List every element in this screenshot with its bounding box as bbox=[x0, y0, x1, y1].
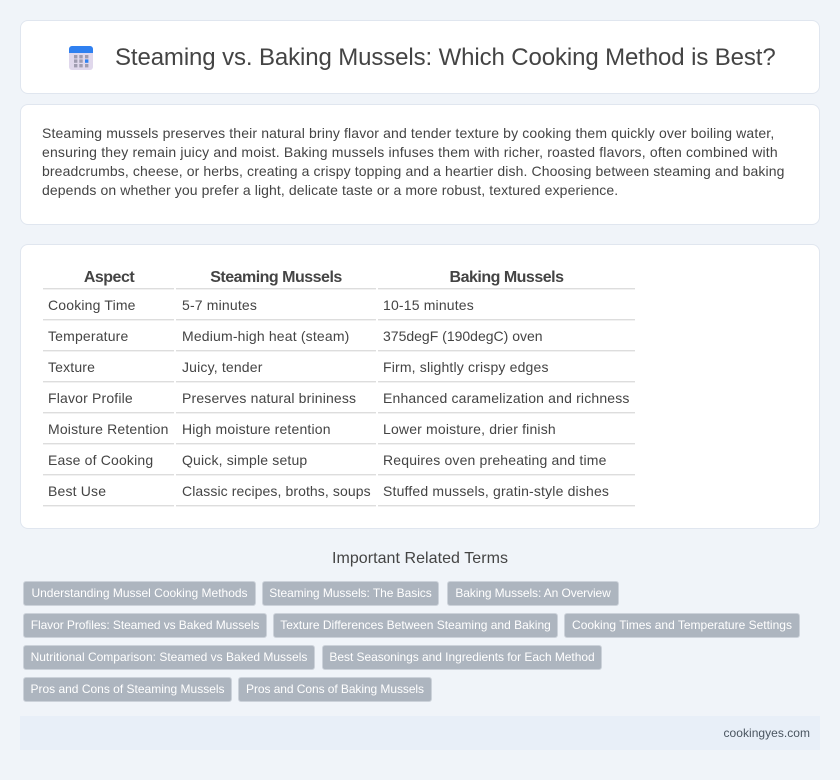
row: texture: Texture bbox=[48, 359, 95, 375]
intro text: Steaming mussels preserves their natural briny flavor and tender texture by cooking them quickly over boiling water, bbox=[42, 125, 774, 141]
row: moisture retention: Lower moisture, drier finish bbox=[383, 421, 556, 437]
row: moisture retention: High moisture retention bbox=[182, 421, 331, 437]
row: ease of cooking: Quick, simple setup bbox=[182, 452, 307, 468]
row: moisture retention bbox=[48, 421, 556, 437]
row: temperature: Temperature bbox=[48, 328, 128, 344]
tags: related terms: Steaming Mussels: The Basics bbox=[269, 586, 432, 600]
footer source: cookingyes.com bbox=[724, 726, 810, 740]
row: ease of cooking: Requires oven preheating and time bbox=[383, 452, 607, 468]
row: moisture retention: Moisture Retention bbox=[48, 421, 169, 437]
intro text: ensuring they remain juicy and moist. Baking mussels infuses them with richer, roasted flavors, often combined with bbox=[42, 144, 778, 160]
row: best use: Stuffed mussels, gratin-style dishes bbox=[383, 483, 609, 499]
tags: related terms: Understanding Mussel Cooking Methods bbox=[31, 586, 248, 600]
row: texture: Juicy, tender bbox=[182, 359, 263, 375]
intro text bbox=[42, 125, 785, 198]
row: best use: Best Use bbox=[48, 483, 106, 499]
row: ease of cooking bbox=[48, 452, 607, 468]
row: flavor profile: Preserves natural brininess bbox=[182, 390, 356, 406]
row: flavor profile: Flavor Profile bbox=[48, 390, 133, 406]
row: flavor profile bbox=[48, 390, 630, 406]
intro text: depends on whether you prefer a light, delicate taste or a more robust, textured experience. bbox=[42, 182, 618, 198]
tags: related terms bbox=[23, 581, 800, 702]
tags: related terms: Pros and Cons of Steaming Mussels bbox=[30, 682, 225, 696]
row: texture bbox=[48, 359, 549, 375]
related terms heading: Important Related Terms bbox=[332, 550, 508, 567]
row: cooking time: 5-7 minutes bbox=[182, 297, 257, 313]
table header: steaming: Steaming Mussels bbox=[210, 269, 342, 286]
tags: related terms: Pros and Cons of Baking Mussels bbox=[246, 682, 424, 696]
intro text: breadcrumbs, cheese, or herbs, creating a crispy topping and a heartier dish. Choosing between steaming and baking bbox=[42, 163, 785, 179]
row: texture: Firm, slightly crispy edges bbox=[383, 359, 549, 375]
tags: related terms: Baking Mussels: An Overview bbox=[455, 586, 611, 600]
table header: baking: Baking Mussels bbox=[450, 269, 563, 286]
row: best use: Classic recipes, broths, soups bbox=[182, 483, 371, 499]
tags: related terms: Nutritional Comparison: Steamed vs Baked Mussels bbox=[31, 650, 307, 664]
footer bbox=[20, 716, 820, 750]
tags: related terms: Best Seasonings and Ingredients for Each Method bbox=[329, 650, 595, 664]
tags: related terms: Cooking Times and Temperature Settings bbox=[572, 618, 792, 632]
row: flavor profile: Enhanced caramelization and richness bbox=[383, 390, 630, 406]
title panel bbox=[20, 20, 820, 94]
row: cooking time bbox=[48, 297, 474, 313]
row: temperature: Medium-high heat (steam) bbox=[182, 328, 349, 344]
title: Steaming vs. Baking Mussels: Which Cooking Method is Best? bbox=[115, 44, 776, 71]
row: temperature bbox=[48, 328, 543, 344]
row: cooking time: 10-15 minutes bbox=[383, 297, 474, 313]
tags: related terms: Flavor Profiles: Steamed vs Baked Mussels bbox=[31, 618, 259, 632]
table header: aspect: Aspect bbox=[84, 269, 134, 286]
icon: calendar bbox=[69, 46, 93, 70]
tags: related terms: Texture Differences Between Steaming and Baking bbox=[280, 618, 551, 632]
row: best use bbox=[48, 483, 609, 499]
panel: comparison table bbox=[20, 244, 820, 529]
row: temperature: 375degF (190degC) oven bbox=[383, 328, 543, 344]
panel: introduction bbox=[20, 104, 820, 225]
row: ease of cooking: Ease of Cooking bbox=[48, 452, 153, 468]
row: cooking time: Cooking Time bbox=[48, 297, 136, 313]
